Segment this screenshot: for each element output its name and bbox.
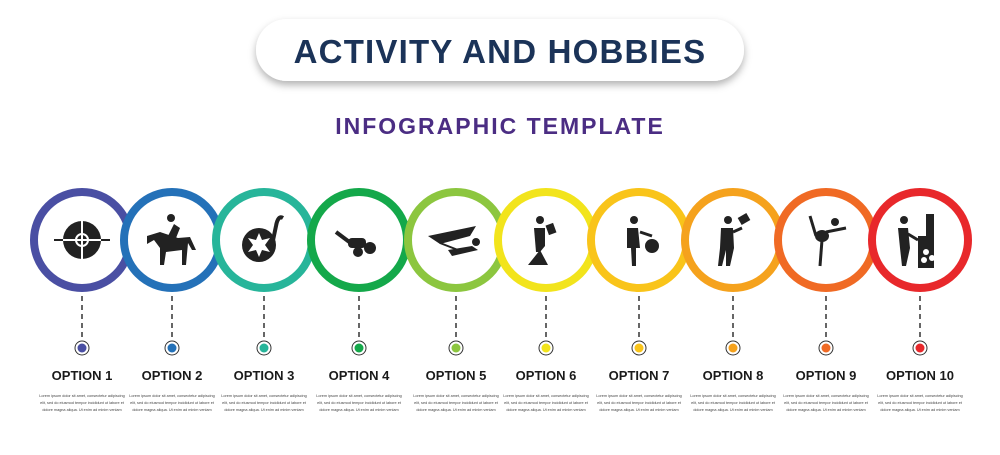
description texts: elit, sed do eiusmod tempor incididunt ut labore et	[414, 401, 499, 405]
description texts: elit, sed do eiusmod tempor incididunt ut labore et	[40, 401, 125, 405]
description texts: elit, sed do eiusmod tempor incididunt ut labore et	[222, 401, 307, 405]
icon: diver	[336, 232, 376, 257]
description texts: dolore magna aliqua. Ut enim ad minim veniam	[506, 408, 586, 412]
description texts: elit, sed do eiusmod tempor incididunt ut labore et	[691, 401, 776, 405]
description texts: dolore magna aliqua. Ut enim ad minim veniam	[880, 408, 960, 412]
description texts: Lorem ipsum dolor sit amet, consectetur adipiscing	[690, 394, 776, 398]
option labels: OPTION 5	[426, 368, 486, 383]
description texts: dolore magna aliqua. Ut enim ad minim veniam	[224, 408, 304, 412]
option labels: OPTION 6	[516, 368, 576, 383]
description texts: Lorem ipsum dolor sit amet, consectetur adipiscing	[316, 394, 402, 398]
icon: arcade	[898, 214, 935, 268]
icon: target	[54, 216, 110, 264]
description texts: elit, sed do eiusmod tempor incididunt ut labore et	[784, 401, 869, 405]
title pill	[256, 19, 744, 81]
description texts: Lorem ipsum dolor sit amet, consectetur adipiscing	[39, 394, 125, 398]
description texts: Lorem ipsum dolor sit amet, consectetur adipiscing	[129, 394, 215, 398]
option labels: OPTION 9	[796, 368, 856, 383]
option labels: OPTION 7	[609, 368, 669, 383]
description texts: Lorem ipsum dolor sit amet, consectetur adipiscing	[783, 394, 869, 398]
connectors	[82, 296, 920, 338]
description texts: dolore magna aliqua. Ut enim ad minim veniam	[786, 408, 866, 412]
description texts: elit, sed do eiusmod tempor incididunt ut labore et	[597, 401, 682, 405]
option labels: OPTION 8	[703, 368, 763, 383]
description texts: dolore magna aliqua. Ut enim ad minim veniam	[132, 408, 212, 412]
description texts: elit, sed do eiusmod tempor incididunt ut labore et	[878, 401, 963, 405]
description texts: elit, sed do eiusmod tempor incididunt ut labore et	[504, 401, 589, 405]
description texts: dolore magna aliqua. Ut enim ad minim veniam	[693, 408, 773, 412]
marker dots	[75, 341, 927, 355]
icon: kick	[810, 216, 846, 266]
icon: bag	[627, 216, 659, 266]
description texts: Lorem ipsum dolor sit amet, consectetur adipiscing	[413, 394, 499, 398]
option labels	[52, 368, 954, 383]
description texts: elit, sed do eiusmod tempor incididunt ut labore et	[317, 401, 402, 405]
description texts: Lorem ipsum dolor sit amet, consectetur adipiscing	[596, 394, 682, 398]
rings	[34, 192, 968, 288]
option labels: OPTION 2	[142, 368, 202, 383]
description texts: Lorem ipsum dolor sit amet, consectetur adipiscing	[877, 394, 963, 398]
description texts: elit, sed do eiusmod tempor incididunt ut labore et	[130, 401, 215, 405]
description texts: dolore magna aliqua. Ut enim ad minim veniam	[599, 408, 679, 412]
description texts: dolore magna aliqua. Ut enim ad minim veniam	[416, 408, 496, 412]
description texts: dolore magna aliqua. Ut enim ad minim veniam	[42, 408, 122, 412]
title pill: ACTIVITY AND HOBBIES	[294, 33, 706, 70]
option labels: OPTION 1	[52, 368, 112, 383]
icon: person with tray	[718, 213, 750, 266]
icon: person reading	[528, 216, 556, 265]
option labels: OPTION 10	[886, 368, 954, 383]
icon: hang glider	[428, 226, 480, 256]
icon: wheel	[242, 217, 283, 262]
description texts: Lorem ipsum dolor sit amet, consectetur adipiscing	[503, 394, 589, 398]
description texts: Lorem ipsum dolor sit amet, consectetur adipiscing	[221, 394, 307, 398]
description texts: dolore magna aliqua. Ut enim ad minim veniam	[319, 408, 399, 412]
icon: horse rider	[147, 214, 196, 265]
subtitle: INFOGRAPHIC TEMPLATE	[335, 113, 665, 139]
option labels: OPTION 3	[234, 368, 294, 383]
option labels: OPTION 4	[329, 368, 390, 383]
description texts	[39, 394, 963, 412]
